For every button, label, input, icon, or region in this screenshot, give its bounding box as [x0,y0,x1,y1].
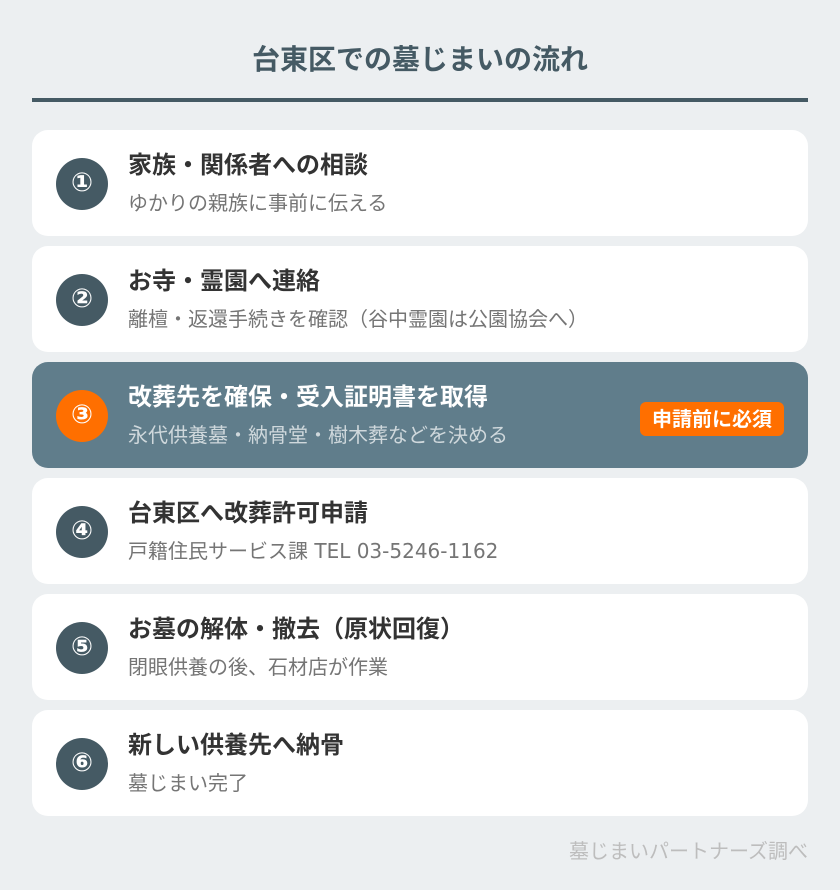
step 2 number: ② [71,284,93,314]
panel: step 1 [32,130,808,236]
source note: 墓じまいパートナーズ調べ [569,839,808,863]
panel: step 6 [32,710,808,816]
title: 台東区での墓じまいの流れ [252,43,588,76]
step 4 description: 戸籍住民サービス課 TEL 03-5246-1162 [128,539,498,563]
step 3 description: 永代供養墓・納骨堂・樹木葬などを決める [128,423,508,447]
step 5 description: 閉眼供養の後、石材店が作業 [128,655,388,679]
step 4 heading: 台東区へ改葬許可申請 [128,499,368,527]
step 3 heading: 改葬先を確保・受入証明書を取得 [128,383,488,411]
panel: step 4 [32,478,808,584]
step 3 number: ③ [71,400,93,430]
step 6 description: 墓じまい完了 [128,771,248,795]
step 5 heading: お墓の解体・撤去（原状回復） [128,615,464,643]
panel: step 3 highlighted [32,362,808,468]
badge: required before application [640,402,784,436]
step 2 heading: お寺・霊園へ連絡 [128,267,320,295]
step 2 description: 離檀・返還手続きを確認（谷中霊園は公園協会へ） [128,307,588,331]
step 3 number [56,390,108,442]
step 5 number [56,622,108,674]
step 2 number [56,274,108,326]
step 6 number [56,738,108,790]
step 6 number: ⑥ [71,748,93,778]
badge: required before application: 申請前に必須 [652,407,772,431]
step 5 number: ⑤ [71,632,93,662]
step 4 number: ④ [71,516,93,546]
panel: step 5 [32,594,808,700]
step 1 description: ゆかりの親族に事前に伝える [128,191,387,215]
step 1 number: ① [71,168,93,198]
panel: step 2 [32,246,808,352]
step 6 heading: 新しい供養先へ納骨 [128,731,344,759]
step 1 number [56,158,108,210]
step 1 heading: 家族・関係者への相談 [128,151,368,179]
step 4 number [56,506,108,558]
